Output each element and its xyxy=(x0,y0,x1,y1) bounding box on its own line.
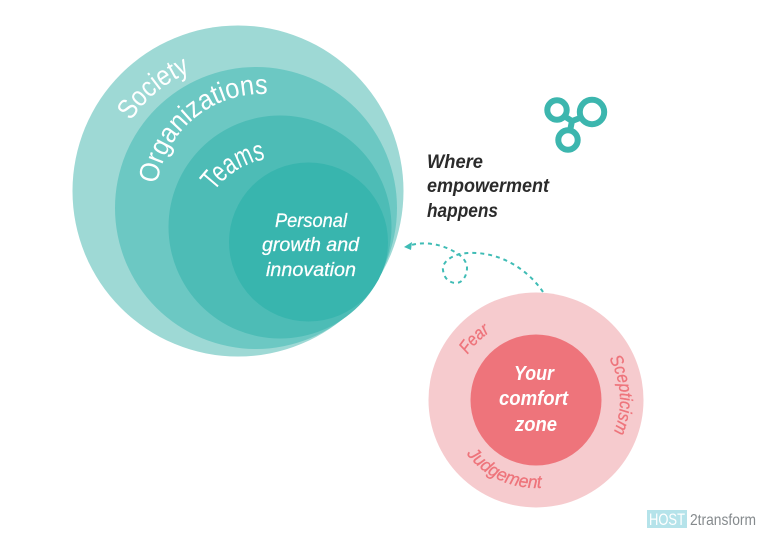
label: Your comfort zone: zone xyxy=(514,413,557,436)
icon: three connected rings xyxy=(547,100,604,150)
heading: Where empowerment happens: empowerment xyxy=(427,175,550,197)
label: Teams: Teams xyxy=(199,145,264,188)
label: Personal growth and innovation: Personal xyxy=(275,210,348,232)
label: Your comfort zone: comfort xyxy=(499,387,569,410)
arrow: dashed loop xyxy=(404,242,543,292)
label: Society: Society xyxy=(118,58,186,118)
label: Scepticism: Scepticism xyxy=(610,356,634,435)
heading: Where empowerment happens: happens xyxy=(427,200,498,222)
circle: teams xyxy=(168,116,392,338)
label: Fear: Fear xyxy=(459,324,488,354)
logo: HOST 2transform xyxy=(647,510,756,529)
circle: comfort zone xyxy=(470,334,602,466)
label: Personal growth and innovation: growth and xyxy=(262,234,360,256)
label: Judgement: Judgement xyxy=(467,449,542,488)
circle: personal growth xyxy=(229,162,388,322)
circle: organizations xyxy=(115,67,397,349)
label: Personal growth and innovation: innovation xyxy=(266,259,356,281)
heading: Where empowerment happens: Where xyxy=(427,151,483,173)
label: Your comfort zone: Your xyxy=(514,362,555,385)
diagram: nested growth circles xyxy=(72,26,404,356)
logo: HOST 2transform: 2transform xyxy=(690,512,756,529)
diagram: comfort zone circles xyxy=(428,292,644,508)
circle: society xyxy=(72,26,404,356)
logo: HOST 2transform: HOST xyxy=(649,510,685,529)
label: Organizations: Organizations xyxy=(140,79,267,181)
circle: outer resistance ring xyxy=(428,292,644,508)
